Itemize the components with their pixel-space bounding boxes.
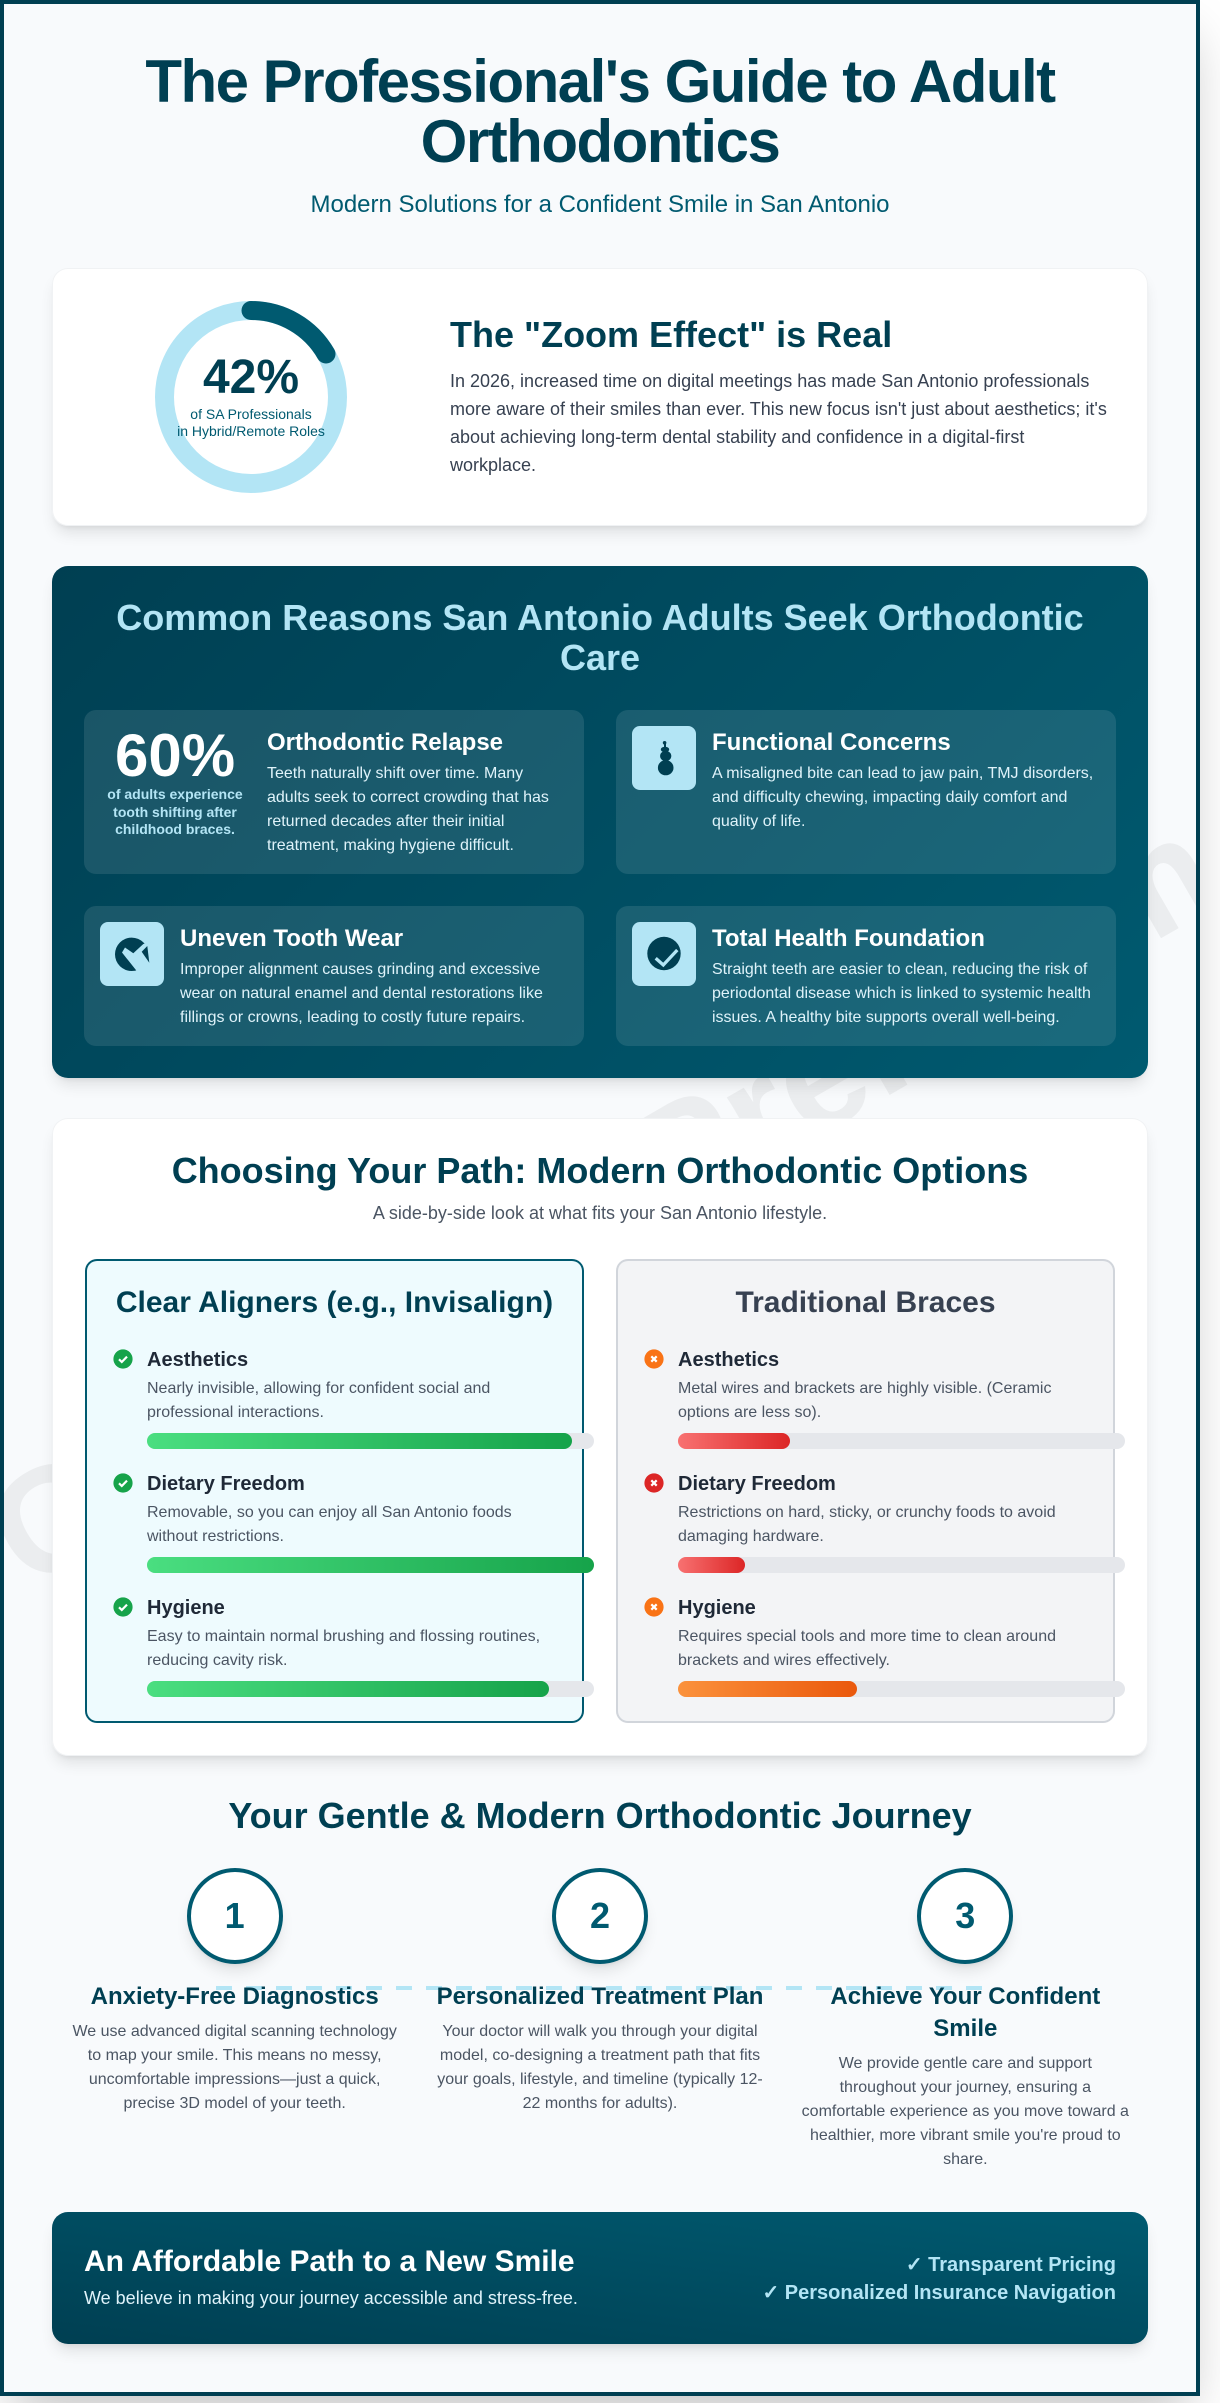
card: uneven tooth wear (84, 906, 584, 1046)
braces row: hygiene: Hygiene (678, 1597, 756, 1619)
wear text: Improper alignment causes grinding and excessive (180, 961, 540, 978)
functional heading: Functional Concerns (712, 729, 951, 756)
braces row: dietary freedom (644, 1473, 1125, 1573)
card: traditional braces (616, 1259, 1115, 1723)
relapse text: treatment, making hygiene difficult. (267, 837, 514, 854)
step 2 number (552, 1868, 648, 1964)
panel: common reasons (52, 566, 1148, 1078)
braces row: aesthetics (644, 1349, 1125, 1449)
step 2 text: model, co-designing a treatment path that fits (440, 2047, 760, 2064)
header title: The Professional's Guide to Adult (145, 48, 1055, 115)
aligners row: aesthetics: professional interactions. (147, 1404, 324, 1421)
health heading: Total Health Foundation (712, 925, 985, 952)
functional text: and difficulty chewing, impacting daily comfort and (712, 789, 1067, 806)
common reasons heading (116, 597, 1084, 678)
step 3 (802, 1868, 1129, 2168)
stat caption: of adults experience (107, 786, 243, 802)
step 2 heading: Personalized Treatment Plan (437, 1983, 763, 2010)
zoom effect text: In 2026, increased time on digital meetings has made San Antonio professionals (450, 371, 1089, 391)
braces row: dietary freedom: Dietary Freedom (678, 1473, 836, 1495)
step 3 text: comfortable experience as you move toward a (802, 2103, 1129, 2120)
step 3 number: 3 (955, 1895, 975, 1936)
panel: orthodontic options (52, 1118, 1148, 1756)
functional text: quality of life. (712, 813, 805, 830)
header title (145, 48, 1056, 175)
step 3 text: throughout your journey, ensuring a (840, 2079, 1091, 2096)
step 1 text: to map your smile. This means no messy, (88, 2047, 382, 2064)
section: orthodontic journey (72, 1795, 1129, 2168)
relapse text: adults seek to correct crowding that has (267, 789, 549, 806)
options subheading: A side-by-side look at what fits your San Antonio lifestyle. (373, 1203, 827, 1223)
wear text: wear on natural enamel and dental restorations like (180, 985, 543, 1002)
functional text: A misaligned bite can lead to jaw pain, TMJ disorders, (712, 765, 1093, 782)
aligners row: hygiene: Hygiene (147, 1597, 225, 1619)
panel: zoom effect (52, 268, 1148, 526)
step 1 heading: Anxiety-Free Diagnostics (91, 1983, 379, 2010)
braces row: aesthetics: options are less so). (678, 1404, 821, 1421)
donut caption (177, 406, 325, 439)
health text: periodontal disease which is linked to systemic health (712, 985, 1091, 1002)
health text (712, 961, 1091, 1026)
relapse text (267, 765, 549, 854)
step 1 text (72, 2023, 397, 2112)
step 1 number (187, 1868, 283, 1964)
donut caption: in Hybrid/Remote Roles (177, 423, 325, 439)
step 2 text: your goals, lifestyle, and timeline (typically 12- (437, 2071, 763, 2088)
step 3 text: We provide gentle care and support (839, 2055, 1092, 2072)
icon: jaw function (632, 726, 696, 790)
step 3 number (917, 1868, 1013, 1964)
aligners row: hygiene: reducing cavity risk. (147, 1652, 288, 1669)
aligners row: dietary freedom: without restrictions. (147, 1528, 284, 1545)
stat: 60% (107, 722, 243, 837)
call to action checklist (762, 2254, 1116, 2304)
step 1 (72, 1868, 397, 2112)
step 2 text: 22 months for adults). (523, 2095, 677, 2112)
wear text: fillings or crowns, leading to costly future repairs. (180, 1009, 525, 1026)
header title: Orthodontics (421, 108, 779, 175)
options heading: Choosing Your Path: Modern Orthodontic Options (172, 1150, 1028, 1191)
call to action heading: An Affordable Path to a New Smile (84, 2245, 575, 2278)
aligners heading: Clear Aligners (e.g., Invisalign) (116, 1286, 553, 1319)
step 1 text: uncomfortable impressions—just a quick, (89, 2071, 380, 2088)
step 3 heading (830, 1983, 1100, 2042)
call to action checklist: ✓ Transparent Pricing (906, 2254, 1116, 2276)
header subtitle: Modern Solutions for a Confident Smile in San Antonio (310, 191, 890, 218)
braces row: hygiene: brackets and wires effectively. (678, 1652, 890, 1669)
braces row: dietary freedom: damaging hardware. (678, 1528, 824, 1545)
step 1 text: precise 3D model of your teeth. (123, 2095, 346, 2112)
aligners row: dietary freedom (113, 1473, 594, 1573)
step 2 text (437, 2023, 763, 2112)
aligners row: aesthetics (113, 1349, 594, 1449)
aligners row: dietary freedom: Removable, so you can enjoy all San Antonio foods (147, 1504, 512, 1521)
step 3 heading: Achieve Your Confident (830, 1983, 1100, 2010)
call to action text: We believe in making your journey accessible and stress-free. (84, 2288, 578, 2308)
braces row: aesthetics: Metal wires and brackets are highly visible. (Ceramic (678, 1380, 1051, 1397)
step 3 heading: Smile (933, 2015, 997, 2042)
step 3 text: healthier, more vibrant smile you're proud to (810, 2127, 1121, 2144)
braces row: dietary freedom: Restrictions on hard, sticky, or crunchy foods to avoid (678, 1504, 1056, 1521)
card: total health foundation (616, 906, 1116, 1046)
health text: issues. A healthy bite supports overall well-being. (712, 1009, 1060, 1026)
relapse text: Teeth naturally shift over time. Many (267, 765, 523, 782)
braces row: hygiene: Requires special tools and more time to clean around (678, 1628, 1056, 1645)
donut value: 42% (203, 351, 299, 404)
card: orthodontic relapse (84, 710, 584, 874)
common reasons heading: Care (560, 637, 640, 678)
aligners row: hygiene (113, 1597, 594, 1697)
functional text (712, 765, 1093, 830)
aligners row: hygiene: Easy to maintain normal brushing and flossing routines, (147, 1628, 540, 1645)
zoom effect text: about achieving long-term dental stability and confidence in a digital-first (450, 427, 1024, 447)
zoom effect text: workplace. (450, 455, 536, 475)
icon: tooth wear (100, 922, 164, 986)
zoom effect text: more aware of their smiles than ever. This new focus isn't just about aesthetics; it's (450, 399, 1107, 419)
donut chart: 42% (155, 301, 347, 493)
braces row: aesthetics: Aesthetics (678, 1349, 779, 1371)
step 3 text: share. (943, 2151, 988, 2168)
health text: Straight teeth are easier to clean, reducing the risk of (712, 961, 1087, 978)
donut caption: of SA Professionals (190, 406, 312, 422)
wear text (180, 961, 543, 1026)
card: functional concerns (616, 710, 1116, 874)
zoom effect heading: The "Zoom Effect" is Real (450, 314, 892, 355)
stat caption: tooth shifting after (113, 804, 237, 820)
step 2 number: 2 (590, 1895, 610, 1936)
step 1 text: We use advanced digital scanning technology (72, 2023, 397, 2040)
step 2 text: Your doctor will walk you through your digital (442, 2023, 758, 2040)
step 2 (437, 1868, 763, 2112)
icon: health check (632, 922, 696, 986)
stat value: 60% (115, 722, 235, 789)
card: clear aligners (85, 1259, 584, 1723)
common reasons heading: Common Reasons San Antonio Adults Seek Orthodontic (116, 597, 1084, 638)
aligners row: aesthetics: Aesthetics (147, 1349, 248, 1371)
aligners row: aesthetics: Nearly invisible, allowing for confident social and (147, 1380, 490, 1397)
stat caption: childhood braces. (115, 821, 235, 837)
relapse text: returned decades after their initial (267, 813, 504, 830)
stat caption (107, 786, 243, 837)
zoom effect text (450, 371, 1107, 475)
call to action checklist: ✓ Personalized Insurance Navigation (762, 2282, 1116, 2304)
panel: affordable path call to action (52, 2212, 1148, 2344)
journey heading: Your Gentle & Modern Orthodontic Journey (228, 1795, 972, 1836)
step 3 text (802, 2055, 1129, 2168)
braces heading: Traditional Braces (735, 1286, 996, 1319)
relapse heading: Orthodontic Relapse (267, 729, 503, 756)
braces row: hygiene (644, 1597, 1125, 1697)
wear heading: Uneven Tooth Wear (180, 925, 403, 952)
aligners row: dietary freedom: Dietary Freedom (147, 1473, 305, 1495)
step 1 number: 1 (225, 1895, 245, 1936)
